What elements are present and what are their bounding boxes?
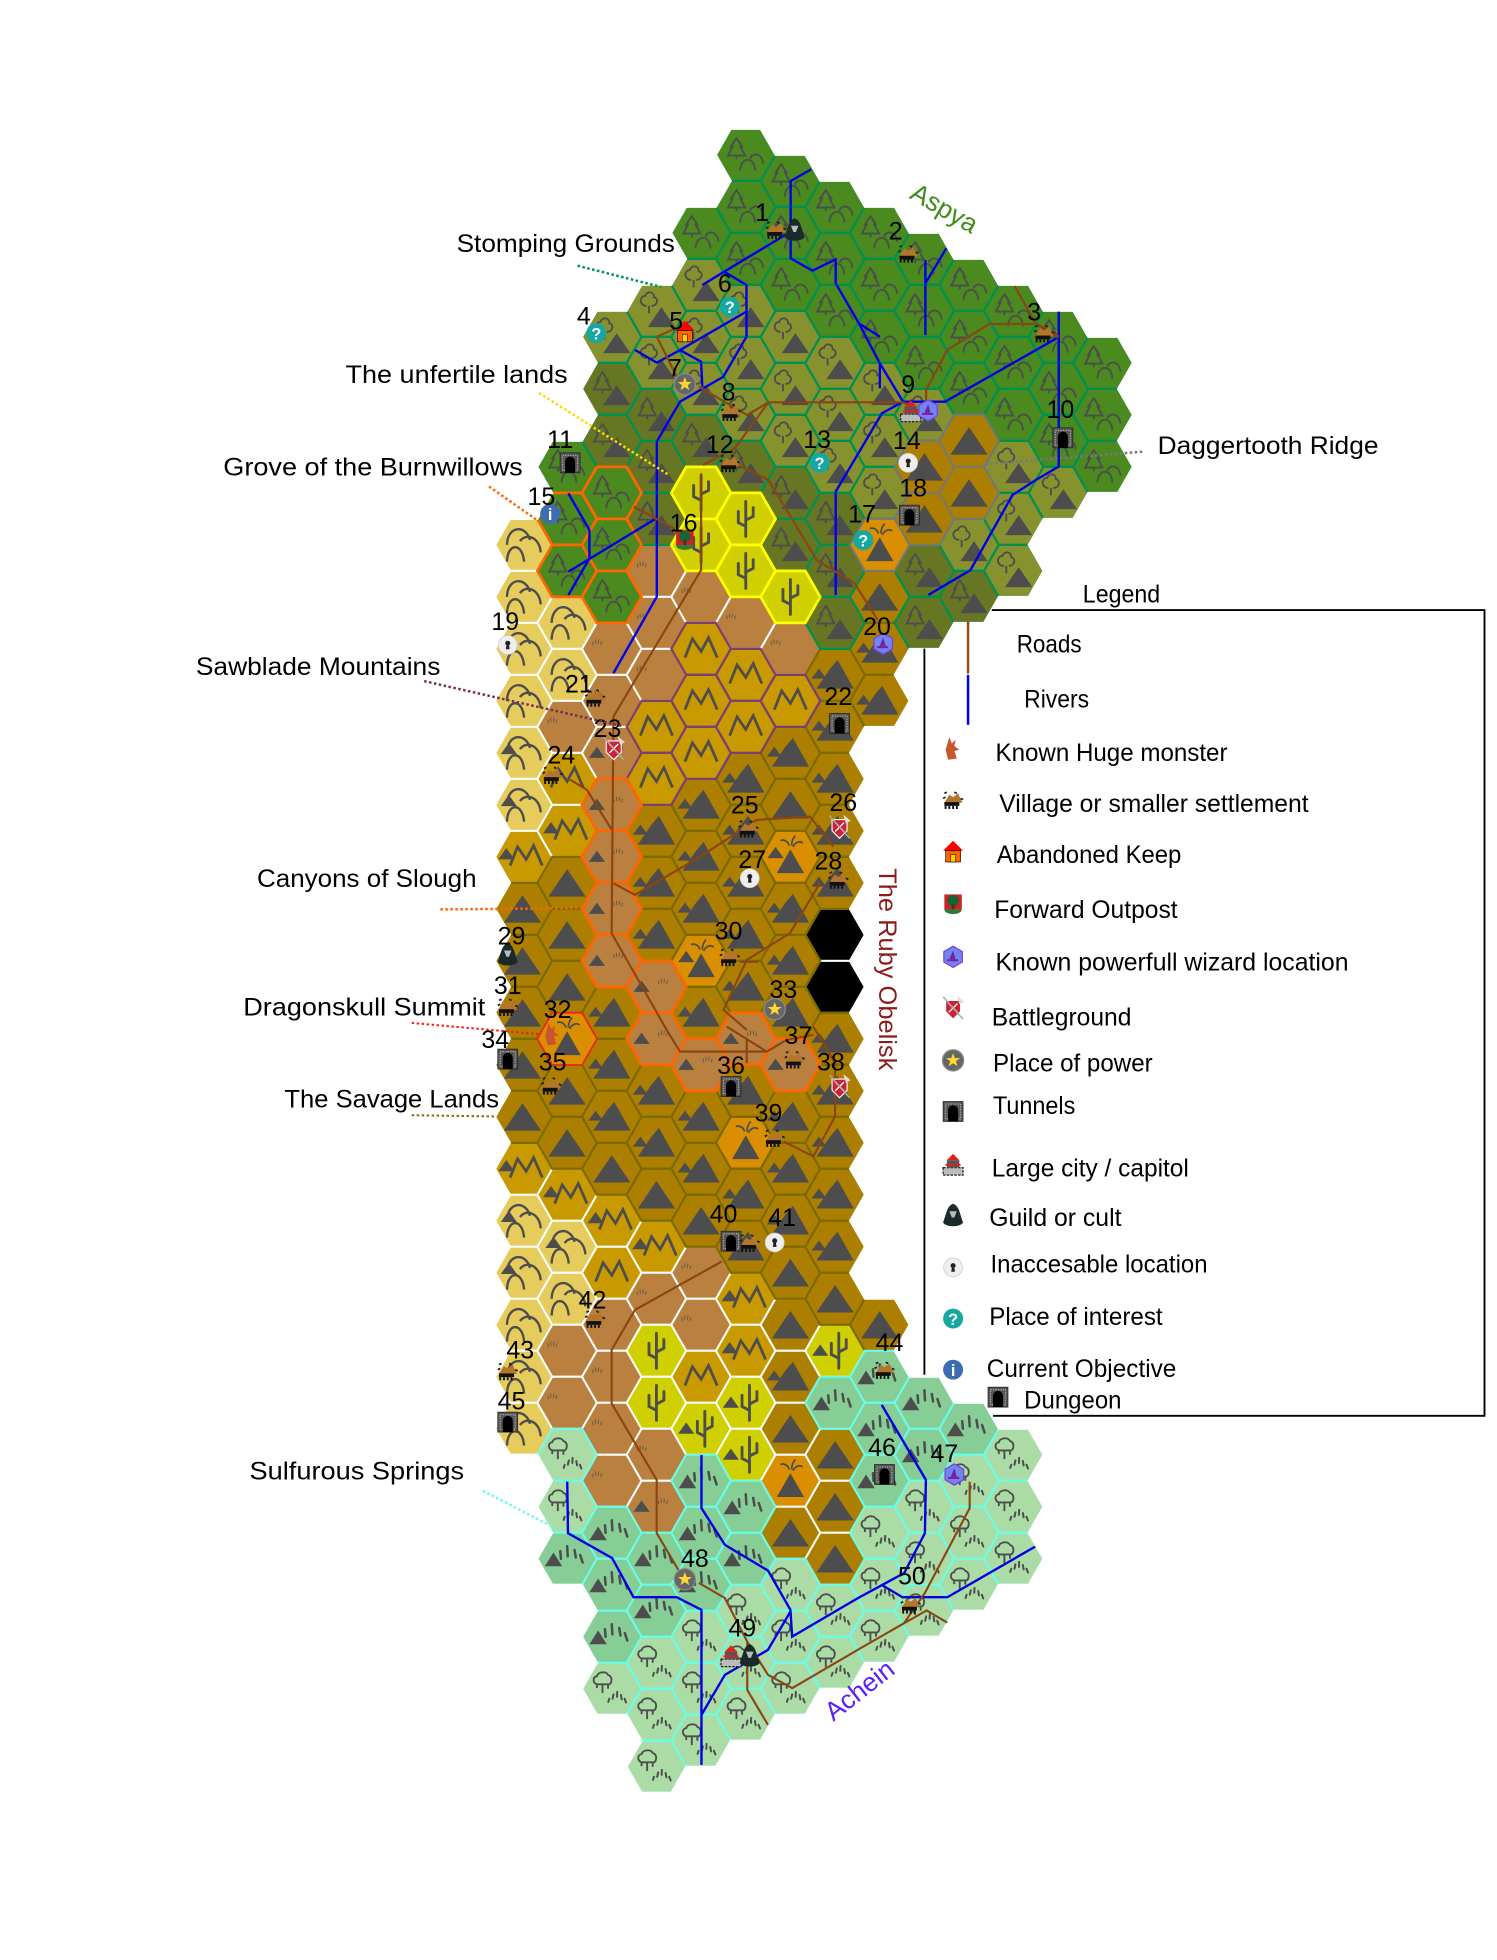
location 48: place of power: 48: [681, 1545, 709, 1573]
location 15: current objective: [528, 483, 560, 524]
location 17: place of interest: ?: [858, 532, 868, 550]
location 37: village: [785, 1022, 812, 1068]
legend item: Dungeon: Dungeon: [1024, 1386, 1121, 1414]
location 4: place of interest: ?: [591, 325, 601, 343]
location 44: village: [874, 1329, 903, 1379]
legend item: Known Huge monster: Known Huge monster: [995, 739, 1228, 767]
location 8: village: 8: [722, 378, 735, 406]
location 50: village: 50: [898, 1562, 926, 1590]
location 36: tunnels: 36: [717, 1052, 745, 1080]
location 38: battleground: [817, 1048, 851, 1098]
location 16: forward outpost: 16: [670, 509, 698, 537]
location 36: tunnels: [717, 1052, 745, 1097]
location 44: village: 44: [876, 1329, 903, 1357]
location 29: guild: 29: [498, 922, 525, 950]
location 31: village: 31: [494, 972, 522, 1000]
label: Stomping Grounds: Stomping Grounds: [457, 230, 675, 258]
location 11: tunnels: [547, 426, 580, 473]
location 32: huge monster: [544, 996, 572, 1045]
location 11: tunnels: 11: [547, 426, 573, 454]
hex map: [449, 76, 1179, 1846]
location 30: village: 30: [715, 917, 742, 945]
leader line: Sulfurous Springs: [483, 1491, 555, 1528]
location 2: village: 2: [889, 218, 903, 246]
region: The Savage Lands: [493, 571, 910, 1351]
location 45: tunnels: [498, 1388, 525, 1432]
leader line: Sawblade Mountains: [424, 681, 623, 726]
label: The Savage Lands: The Savage Lands: [284, 1086, 499, 1114]
legend item: Roads: [968, 621, 1082, 674]
legend item: Rivers: Rivers: [1024, 685, 1089, 713]
legend item: Tunnels: [943, 1092, 1075, 1121]
location 43: village: [498, 1336, 534, 1380]
legend item: Village: Village or smaller settlement: [999, 790, 1309, 818]
location 24: village: 24: [548, 741, 575, 769]
location 42: village: [579, 1287, 606, 1328]
location 15: current objective: i: [548, 506, 552, 524]
legend item: Battleground: Battleground: [992, 1003, 1131, 1031]
location 5: abandoned keep: [669, 307, 695, 342]
location 33: place of power: 33: [770, 976, 797, 1004]
legend title: Legend: [1083, 581, 1160, 609]
leader line: Stomping Grounds: [578, 266, 661, 287]
legend item: Rivers: [968, 675, 1089, 725]
location 41: inaccessible: 41: [768, 1204, 796, 1232]
location 26: battleground: [829, 789, 857, 838]
location 27: inaccessible: [738, 846, 766, 888]
legend item: Inaccesable location: Inaccesable location: [991, 1250, 1208, 1278]
region: open lands with white borders: [493, 519, 865, 1585]
location 15: current objective: 15: [528, 483, 555, 511]
location 3: village: [1027, 299, 1054, 342]
location 2: village: [889, 218, 918, 263]
location 40: tunnels and village: 40: [710, 1201, 737, 1229]
location 16: forward outpost: [670, 509, 698, 550]
region: Daggertooth Ridge: [850, 415, 999, 571]
region labels: [196, 177, 1378, 1727]
location 12: village: 12: [706, 431, 734, 459]
location 26: battleground: 26: [829, 789, 857, 817]
location 19: inaccessible: 19: [491, 608, 519, 636]
location 23: battleground: [594, 715, 625, 760]
location 1: village and guild: [755, 199, 805, 241]
location 32: huge monster: 32: [544, 996, 572, 1024]
location 9: large city and wizard: [901, 371, 937, 422]
location 34: tunnels: [481, 1026, 518, 1069]
location 50: village: [898, 1562, 926, 1614]
legend frame: [924, 610, 1484, 1416]
location 34: tunnels: 34: [481, 1026, 509, 1054]
label: Dragonskull Summit: Dragonskull Summit: [243, 993, 485, 1021]
location 13: place of interest: ?: [815, 455, 825, 473]
location 1: village and guild: 1: [755, 199, 769, 227]
location 21: village: [565, 670, 605, 707]
legend item: Current Objective: i: [951, 1362, 955, 1380]
location 27: inaccessible: 27: [738, 846, 766, 874]
label: Sawblade Mountains: Sawblade Mountains: [196, 653, 440, 681]
location 18: tunnels: 18: [899, 474, 927, 502]
location 39: village: 39: [755, 1099, 782, 1127]
panel: legend: [924, 581, 1484, 1416]
legend item: Wizard: Known powerfull wizard location: [995, 949, 1349, 977]
region: Canyons of Slough: [582, 779, 820, 1091]
legend item: Place of interest: Place of interest: [989, 1303, 1163, 1331]
location 7: place of power: 7: [668, 355, 682, 383]
location 40: tunnels and village: [710, 1201, 760, 1252]
location 47: wizard: 47: [930, 1440, 958, 1468]
location 29: guild: [498, 922, 525, 966]
label: The unfertile lands: The unfertile lands: [346, 361, 568, 389]
location 10: tunnels: [1046, 396, 1074, 448]
location 28: village: 28: [814, 847, 842, 875]
location 48: place of power: [674, 1545, 709, 1590]
location 17: place of interest: 17: [848, 501, 876, 529]
location 35: village: [539, 1048, 567, 1095]
legend item: Battleground: [943, 995, 1131, 1031]
label: Grove of the Burnwillows: Grove of the Burnwillows: [223, 453, 523, 481]
location 30: village: [715, 917, 742, 966]
location 4: place of interest: [577, 302, 606, 343]
location 22: tunnels: 22: [824, 683, 852, 711]
location 41: inaccessible: [765, 1204, 796, 1252]
location 49: large city and guild: 49: [728, 1615, 756, 1643]
region: Sawblade Mountains: [627, 623, 820, 805]
region: The unfertile lands: [671, 467, 820, 623]
location 14: inaccessible: [893, 427, 921, 472]
label: The Ruby Obelisk: The Ruby Obelisk: [873, 868, 901, 1071]
location 7: place of power: [668, 355, 695, 395]
locations 1 to 50: [481, 199, 1074, 1667]
region: The Ruby Obelisk black hexes: [805, 909, 865, 1013]
location 23: battleground: 23: [594, 715, 621, 743]
location 18: tunnels: [899, 474, 927, 525]
legend item: Current Objective: Current Objective: [987, 1355, 1176, 1383]
location 46: tunnels: [868, 1434, 896, 1484]
location 31: village: [494, 972, 522, 1016]
legend item: Forward Outpost: Forward Outpost: [994, 896, 1178, 924]
location 8: village: [721, 378, 741, 421]
leader line: The unfertile lands: [539, 393, 667, 474]
location 20: wizard: 20: [863, 613, 891, 641]
legend item: Guild or cult: Guild or cult: [989, 1204, 1122, 1232]
location 35: village: 35: [539, 1048, 567, 1076]
legend item: Abandoned Keep: Abandoned Keep: [997, 841, 1181, 869]
location 13: place of interest: [803, 426, 831, 473]
location 33: place of power: [764, 976, 797, 1020]
region: Sulfurous Springs: [537, 1351, 1043, 1793]
location 12: village: [706, 431, 740, 472]
label: Aspya: Aspya: [905, 177, 984, 239]
location 22: tunnels: [824, 683, 852, 734]
leader line: Canyons of Slough: [440, 908, 586, 909]
label: Achein: Achein: [819, 1654, 900, 1727]
leader line: Dragonskull Summit: [412, 1023, 539, 1034]
location 49: large city and guild: [721, 1615, 760, 1667]
label: Sulfurous Springs: Sulfurous Springs: [250, 1457, 464, 1485]
location 17: place of interest: [848, 501, 876, 550]
location 25: village: [731, 791, 759, 838]
location 14: inaccessible: 14: [893, 427, 921, 455]
leader line: The Savage Lands: [412, 1115, 495, 1116]
location 4: place of interest: 4: [577, 302, 591, 330]
location 39: village: [755, 1099, 785, 1147]
legend item: Tunnels: Tunnels: [993, 1092, 1075, 1120]
location 46: tunnels: 46: [868, 1434, 896, 1462]
region: Dragonskull Summit: [537, 1013, 597, 1065]
roads: [570, 286, 1059, 1725]
location 45: tunnels: 45: [498, 1388, 525, 1416]
region: Aspya forests and Stomping Grounds: [537, 129, 1133, 649]
location 25: village: 25: [731, 791, 759, 819]
location 21: village: 21: [565, 670, 593, 698]
location 43: village: 43: [506, 1336, 534, 1364]
leader line: Daggertooth Ridge: [986, 452, 1144, 464]
location 20: wizard: [863, 613, 892, 654]
location 37: village: 37: [785, 1022, 812, 1050]
rivers: [567, 169, 1059, 1765]
label: Canyons of Slough: Canyons of Slough: [257, 865, 477, 893]
region: Grove of the Burnwillows: [537, 467, 642, 623]
location 9: large city and wizard: 9: [901, 371, 915, 399]
legend item: Roads: Roads: [1017, 630, 1082, 658]
location 6: place of interest: [718, 270, 740, 317]
location 38: battleground: 38: [817, 1048, 845, 1076]
leader line: Grove of the Burnwillows: [489, 487, 539, 521]
legend item: Place of power: Place of power: [993, 1050, 1153, 1078]
location 5: abandoned keep: 5: [669, 307, 683, 335]
location 13: place of interest: 13: [803, 426, 831, 454]
location 3: village: 3: [1027, 299, 1041, 327]
legend item: Place of interest: ?: [948, 1311, 958, 1329]
location 19: inaccessible: [491, 608, 519, 654]
location 24: village: [543, 741, 575, 784]
location 10: tunnels: 10: [1046, 396, 1074, 424]
location 6: place of interest: 6: [718, 270, 732, 298]
label: Daggertooth Ridge: Daggertooth Ridge: [1158, 432, 1378, 460]
legend item: Large city: Large city / capitol: [992, 1154, 1189, 1182]
location 47: wizard: [930, 1440, 964, 1485]
location 42: village: 42: [579, 1287, 606, 1315]
location 28: village: [814, 847, 848, 889]
location 6: place of interest: ?: [725, 299, 735, 317]
